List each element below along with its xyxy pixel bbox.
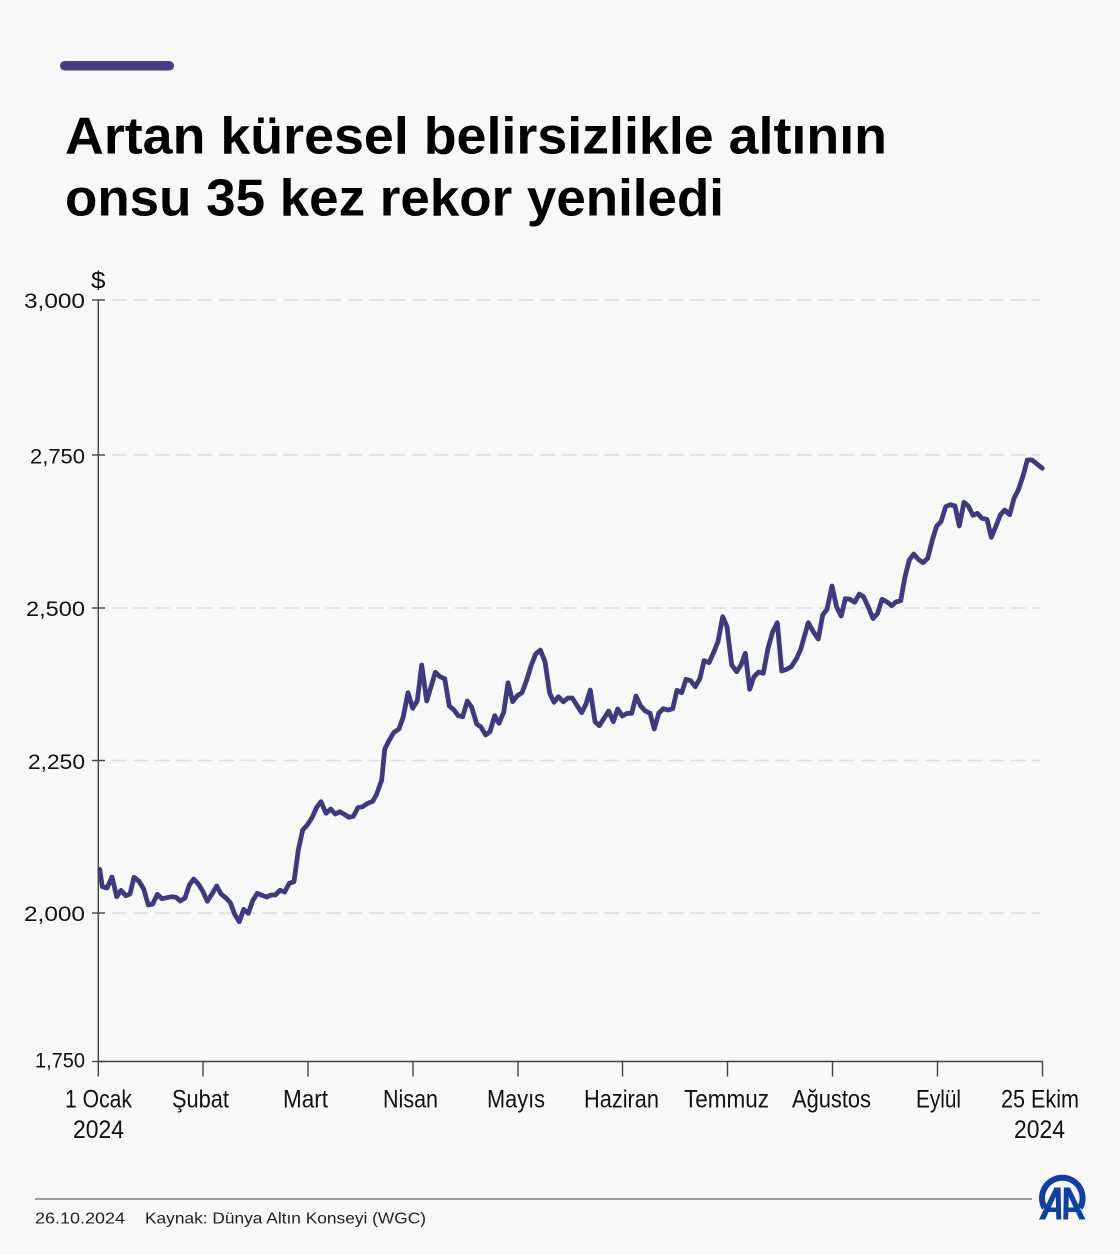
x axis labels: Mayıs: [487, 1086, 545, 1114]
title: [65, 108, 887, 228]
y axis with ticks: [92, 300, 105, 1076]
x axis labels: 2024: [1014, 1116, 1065, 1144]
y axis labels: 2,250: [28, 750, 85, 774]
grid lines: [112, 300, 1040, 913]
x axis labels: Temmuz: [684, 1086, 769, 1114]
x axis labels: Nisan: [383, 1086, 438, 1114]
y axis labels: 1,750: [35, 1048, 85, 1072]
x axis labels: Mart: [283, 1086, 328, 1114]
x axis labels: Şubat: [172, 1086, 229, 1114]
x axis labels: 25 Ekim: [1001, 1086, 1079, 1114]
icon: AA logo: [1039, 1178, 1086, 1220]
y axis labels: 2,500: [26, 597, 85, 621]
x axis labels: Haziran: [584, 1086, 659, 1114]
x axis labels: 2024: [73, 1116, 124, 1144]
x axis labels: Eylül: [916, 1086, 961, 1114]
y axis labels: 2,000: [24, 902, 85, 926]
footer source: Kaynak: Dünya Altın Konseyi (WGC): [145, 1210, 426, 1228]
x axis labels: 1 Ocak: [65, 1086, 132, 1114]
line chart: gold ounce price: [100, 460, 1042, 922]
y axis labels: [24, 289, 85, 1072]
x axis labels: [65, 1086, 1079, 1144]
y axis labels: 2,750: [30, 444, 85, 468]
title: onsu 35 kez rekor yeniledi: [65, 170, 724, 228]
y axis unit: $: [91, 268, 106, 294]
title: Artan küresel belirsizlikle altının: [65, 108, 887, 166]
footer date: 26.10.2024: [35, 1210, 125, 1228]
footer rule: [35, 1198, 1032, 1200]
accent bar: [60, 61, 174, 70]
x axis labels: Ağustos: [792, 1086, 871, 1114]
x axis with ticks: [98, 1062, 1043, 1076]
y axis labels: 3,000: [24, 289, 85, 313]
